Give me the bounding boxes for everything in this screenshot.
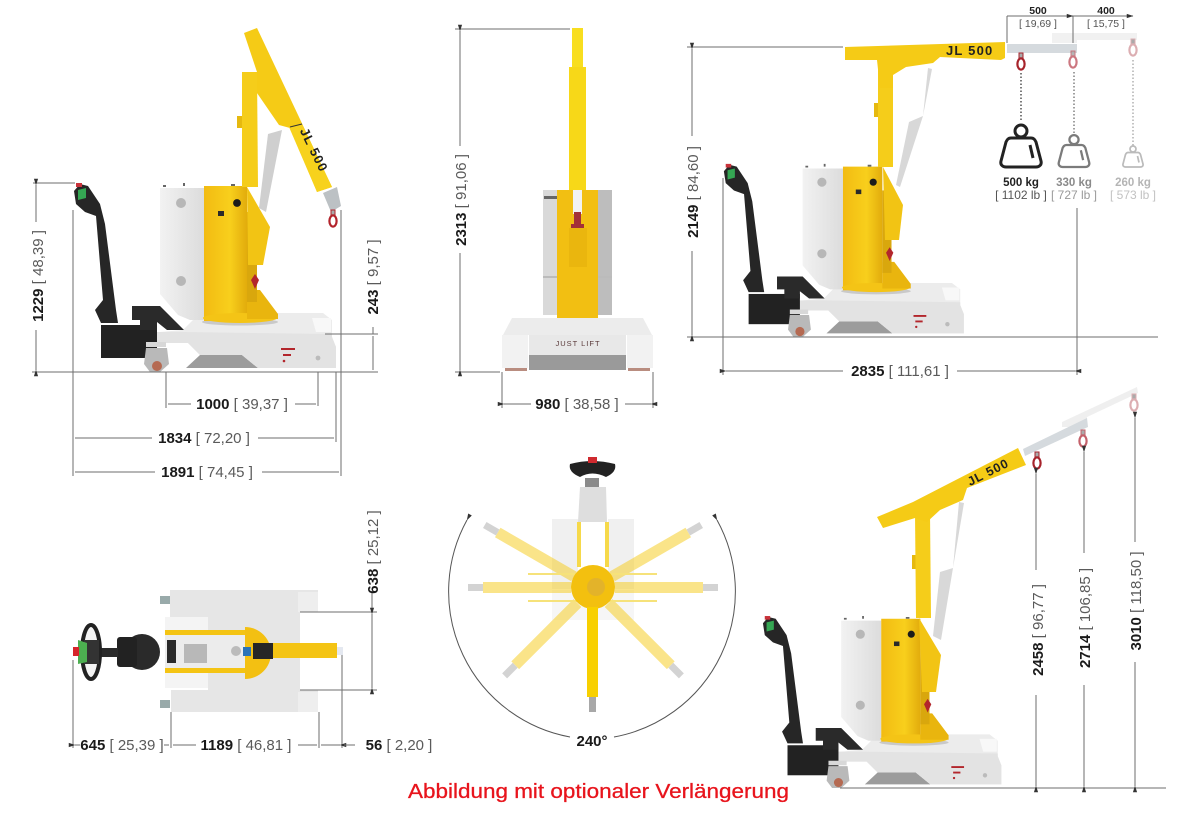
- dimension: 1189: 1189 [ 46,81 ]: [201, 737, 291, 754]
- caption: optional extension note: Abbildung mit optionaler Verlängerung: [408, 781, 789, 803]
- icon: 260 kg weight: [1123, 146, 1143, 167]
- load label 330 kg: [ 727 lb ]: [1051, 188, 1097, 202]
- load label 260 kg: [ 573 lb ]: [1110, 188, 1156, 202]
- boom label: JL 500: [297, 125, 331, 175]
- dimension: 56: 56 [ 2,20 ]: [366, 737, 432, 754]
- load label 260 kg: 260 kg: [1115, 177, 1151, 189]
- boom label: JL 500: [946, 43, 993, 58]
- load line dotted: [1021, 60, 1133, 146]
- arrow: 240 degree arc: [449, 520, 735, 737]
- dimension: 1891: 1891 [ 74,45 ]: [161, 464, 253, 481]
- load label 500 kg: 500 kg: [1003, 177, 1039, 189]
- panel: side view folded boom: [30, 28, 382, 481]
- dimension: 500 extension: 500: [1029, 5, 1047, 17]
- machine: side view folded: [74, 28, 341, 372]
- dimension: 1000: 1000 [ 39,37 ]: [196, 396, 288, 413]
- icon: 330 kg weight: [1059, 135, 1089, 167]
- machine: rotation overlay: [468, 457, 718, 712]
- load label 500 kg: [ 1102 lb ]: [995, 188, 1047, 202]
- dimension lines: inclined boom: [840, 418, 1166, 788]
- icon: 500 kg weight: [1001, 125, 1041, 167]
- panel: inclined boom view: [763, 387, 1166, 788]
- dimension: 400 extension: 400: [1097, 5, 1115, 17]
- machine: horizontal boom: [724, 33, 1137, 337]
- dimension: 400 extension: [ 15,75 ]: [1087, 18, 1125, 30]
- dimension lines: front view: [455, 29, 653, 408]
- dimension: 3010: 3010 [ 118,50 ]: [1128, 552, 1145, 650]
- dimension lines: horizontal boom: [687, 16, 1158, 375]
- load label 330 kg: 330 kg: [1056, 177, 1092, 189]
- dimension: 980: 980 [ 38,58 ]: [535, 396, 619, 413]
- boom label: JL 500: [965, 456, 1011, 489]
- dimension: 2313: 2313 [ 91,06 ]: [453, 154, 470, 246]
- dimension: 240 degrees: 240°: [576, 733, 608, 750]
- dimension lines: top view: [73, 593, 377, 748]
- dimension: 2149: 2149 [ 84,60 ]: [685, 146, 702, 238]
- dimension: 1229: 1229 [ 48,39 ]: [30, 230, 47, 322]
- machine: top view: [73, 590, 343, 712]
- dimension: 2835: 2835 [ 111,61 ]: [851, 363, 949, 380]
- panel: 240 degree rotation view: [449, 457, 735, 750]
- dimension: 645: 645 [ 25,39 ]: [80, 737, 164, 754]
- dimension: 2714: 2714 [ 106,85 ]: [1077, 568, 1094, 668]
- dimension: 243: 243 [ 9,57 ]: [365, 239, 382, 315]
- machine: front view: [502, 28, 653, 371]
- dimension: 500 extension: [ 19,69 ]: [1019, 18, 1057, 30]
- front label: JUST LIFT: [555, 339, 601, 348]
- dimension: 638: 638 [ 25,12 ]: [365, 510, 382, 594]
- dimension: 2458: 2458 [ 96,77 ]: [1030, 584, 1047, 676]
- panel: side view horizontal boom with load capacities: [685, 5, 1158, 380]
- machine: inclined boom: [763, 387, 1138, 788]
- panel: front view: [453, 28, 653, 413]
- dimension lines: side view: [32, 183, 378, 476]
- dimension: 1834: 1834 [ 72,20 ]: [158, 430, 250, 447]
- panel: top view: [73, 510, 432, 754]
